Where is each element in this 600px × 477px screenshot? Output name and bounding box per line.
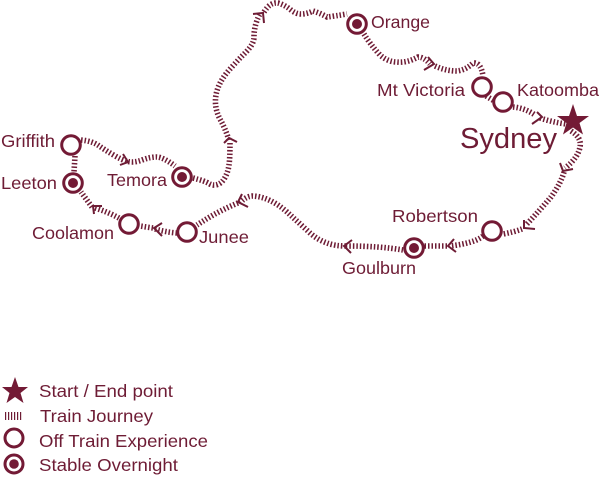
stop: Junee: [178, 223, 249, 247]
stop: Griffith: Griffith: [1, 131, 55, 151]
stop: Temora: [107, 168, 191, 190]
start and end point: Sydney: [460, 104, 589, 155]
stop: Orange: [348, 12, 430, 33]
direction arrows: [93, 13, 573, 253]
stop: Goulburn: [342, 239, 423, 278]
stop: Leeton: Leeton: [1, 173, 57, 193]
legend: start and end point: Start / End point: [39, 381, 173, 401]
train route: [74, 3, 580, 250]
stop: Coolamon: [32, 215, 138, 243]
stop: Katoomba: Katoomba: [517, 80, 599, 100]
start and end point: Sydney: Sydney: [460, 123, 557, 155]
stop: Mt Victoria: Mt Victoria: [377, 80, 465, 100]
stop: Griffith: [1, 131, 80, 154]
stop: Robertson: [392, 206, 501, 240]
legend: off train experience: Off Train Experience: [39, 431, 208, 451]
stop: Orange: Orange: [371, 12, 430, 32]
stop: Goulburn: Goulburn: [342, 258, 416, 278]
stop: Mt Victoria: [377, 78, 491, 100]
stop: Katoomba: [494, 80, 599, 111]
legend: [2, 377, 208, 475]
legend: train journey: Train Journey: [40, 406, 153, 426]
stop: Temora: Temora: [107, 170, 167, 190]
stop: Coolamon: Coolamon: [32, 223, 114, 243]
stop: Leeton: [1, 173, 82, 193]
legend: start and end point: [2, 377, 173, 403]
stop: Junee: Junee: [199, 227, 249, 247]
legend: stable overnight: Stable Overnight: [39, 455, 178, 475]
stop: Robertson: Robertson: [392, 206, 478, 226]
